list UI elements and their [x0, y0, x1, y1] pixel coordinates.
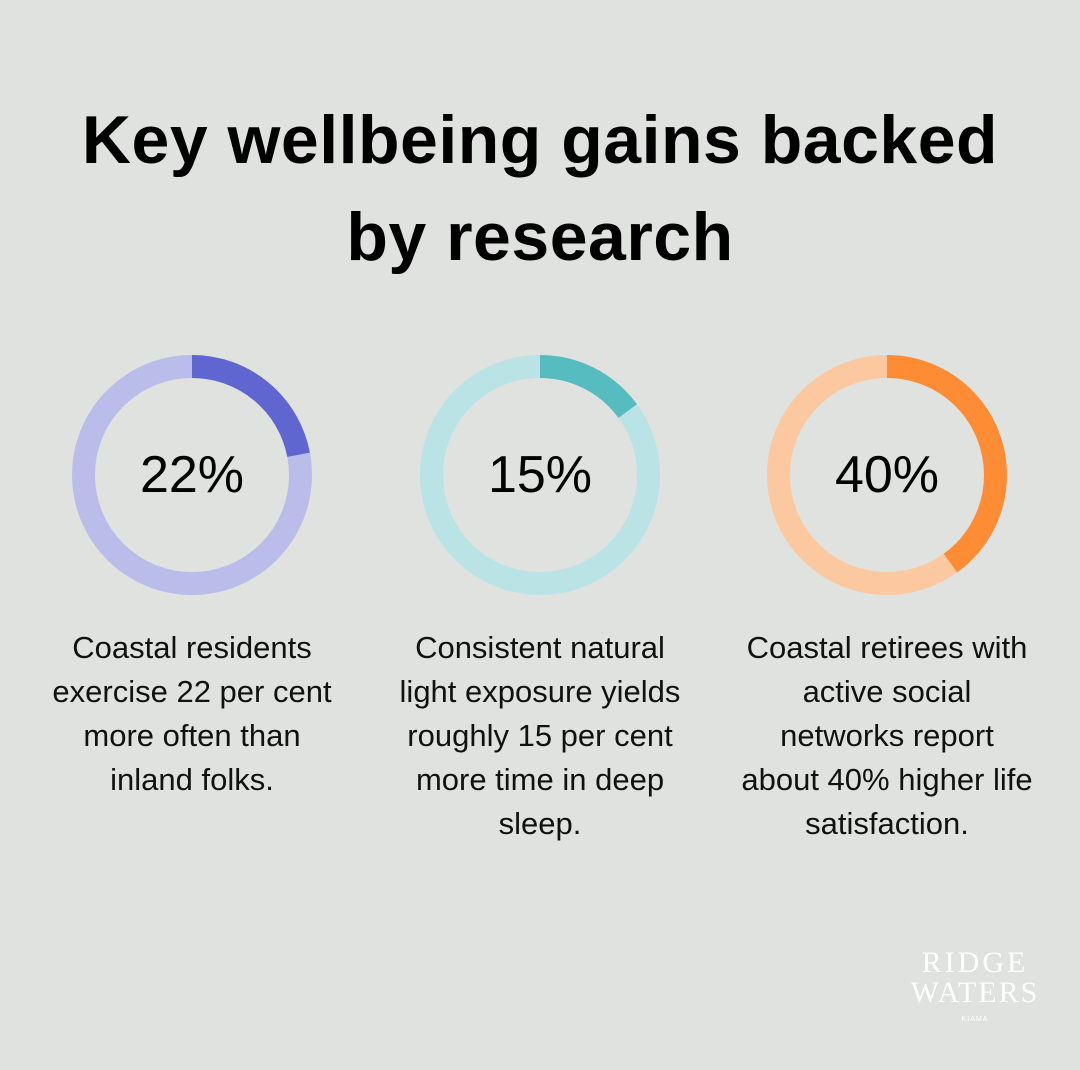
- text: exercise: [52, 630, 332, 797]
- text: social: about 40% higher life: [741, 762, 1033, 797]
- donut: 40%: 40%: [835, 446, 939, 504]
- donut: 15%: 15%: [488, 446, 592, 504]
- donut: 22%: 22%: [140, 446, 244, 504]
- donut: 15%: [420, 355, 660, 595]
- title: by research: [346, 199, 734, 275]
- text: exercise: more often than: [83, 718, 301, 753]
- logo: RIDGE: [922, 946, 1028, 979]
- text: sleep: roughly 15 per cent: [407, 718, 673, 753]
- text: social: networks report: [780, 718, 994, 753]
- text: sleep: more time in deep: [416, 762, 664, 797]
- text: sleep: Consistent natural: [415, 630, 665, 665]
- text: social: Coastal retirees with: [747, 630, 1027, 665]
- text: social: [741, 630, 1033, 841]
- text: sleep: [400, 630, 680, 841]
- logo: KIAMA: [962, 1016, 988, 1023]
- donut: 40%: [767, 355, 1007, 595]
- text: exercise: inland folks.: [110, 762, 274, 797]
- donut: 22%: [72, 355, 312, 595]
- text: sleep: light exposure yields: [400, 674, 680, 709]
- text: sleep: sleep.: [499, 806, 581, 841]
- title: [82, 102, 998, 275]
- logo: [910, 946, 1039, 1023]
- title: Key wellbeing gains backed: [82, 102, 998, 178]
- text: social: active social: [803, 674, 971, 709]
- logo: WATERS: [911, 976, 1039, 1009]
- text: exercise: exercise 22 per cent: [52, 674, 332, 709]
- text: exercise: Coastal residents: [72, 630, 312, 665]
- text: social: satisfaction.: [805, 806, 969, 841]
